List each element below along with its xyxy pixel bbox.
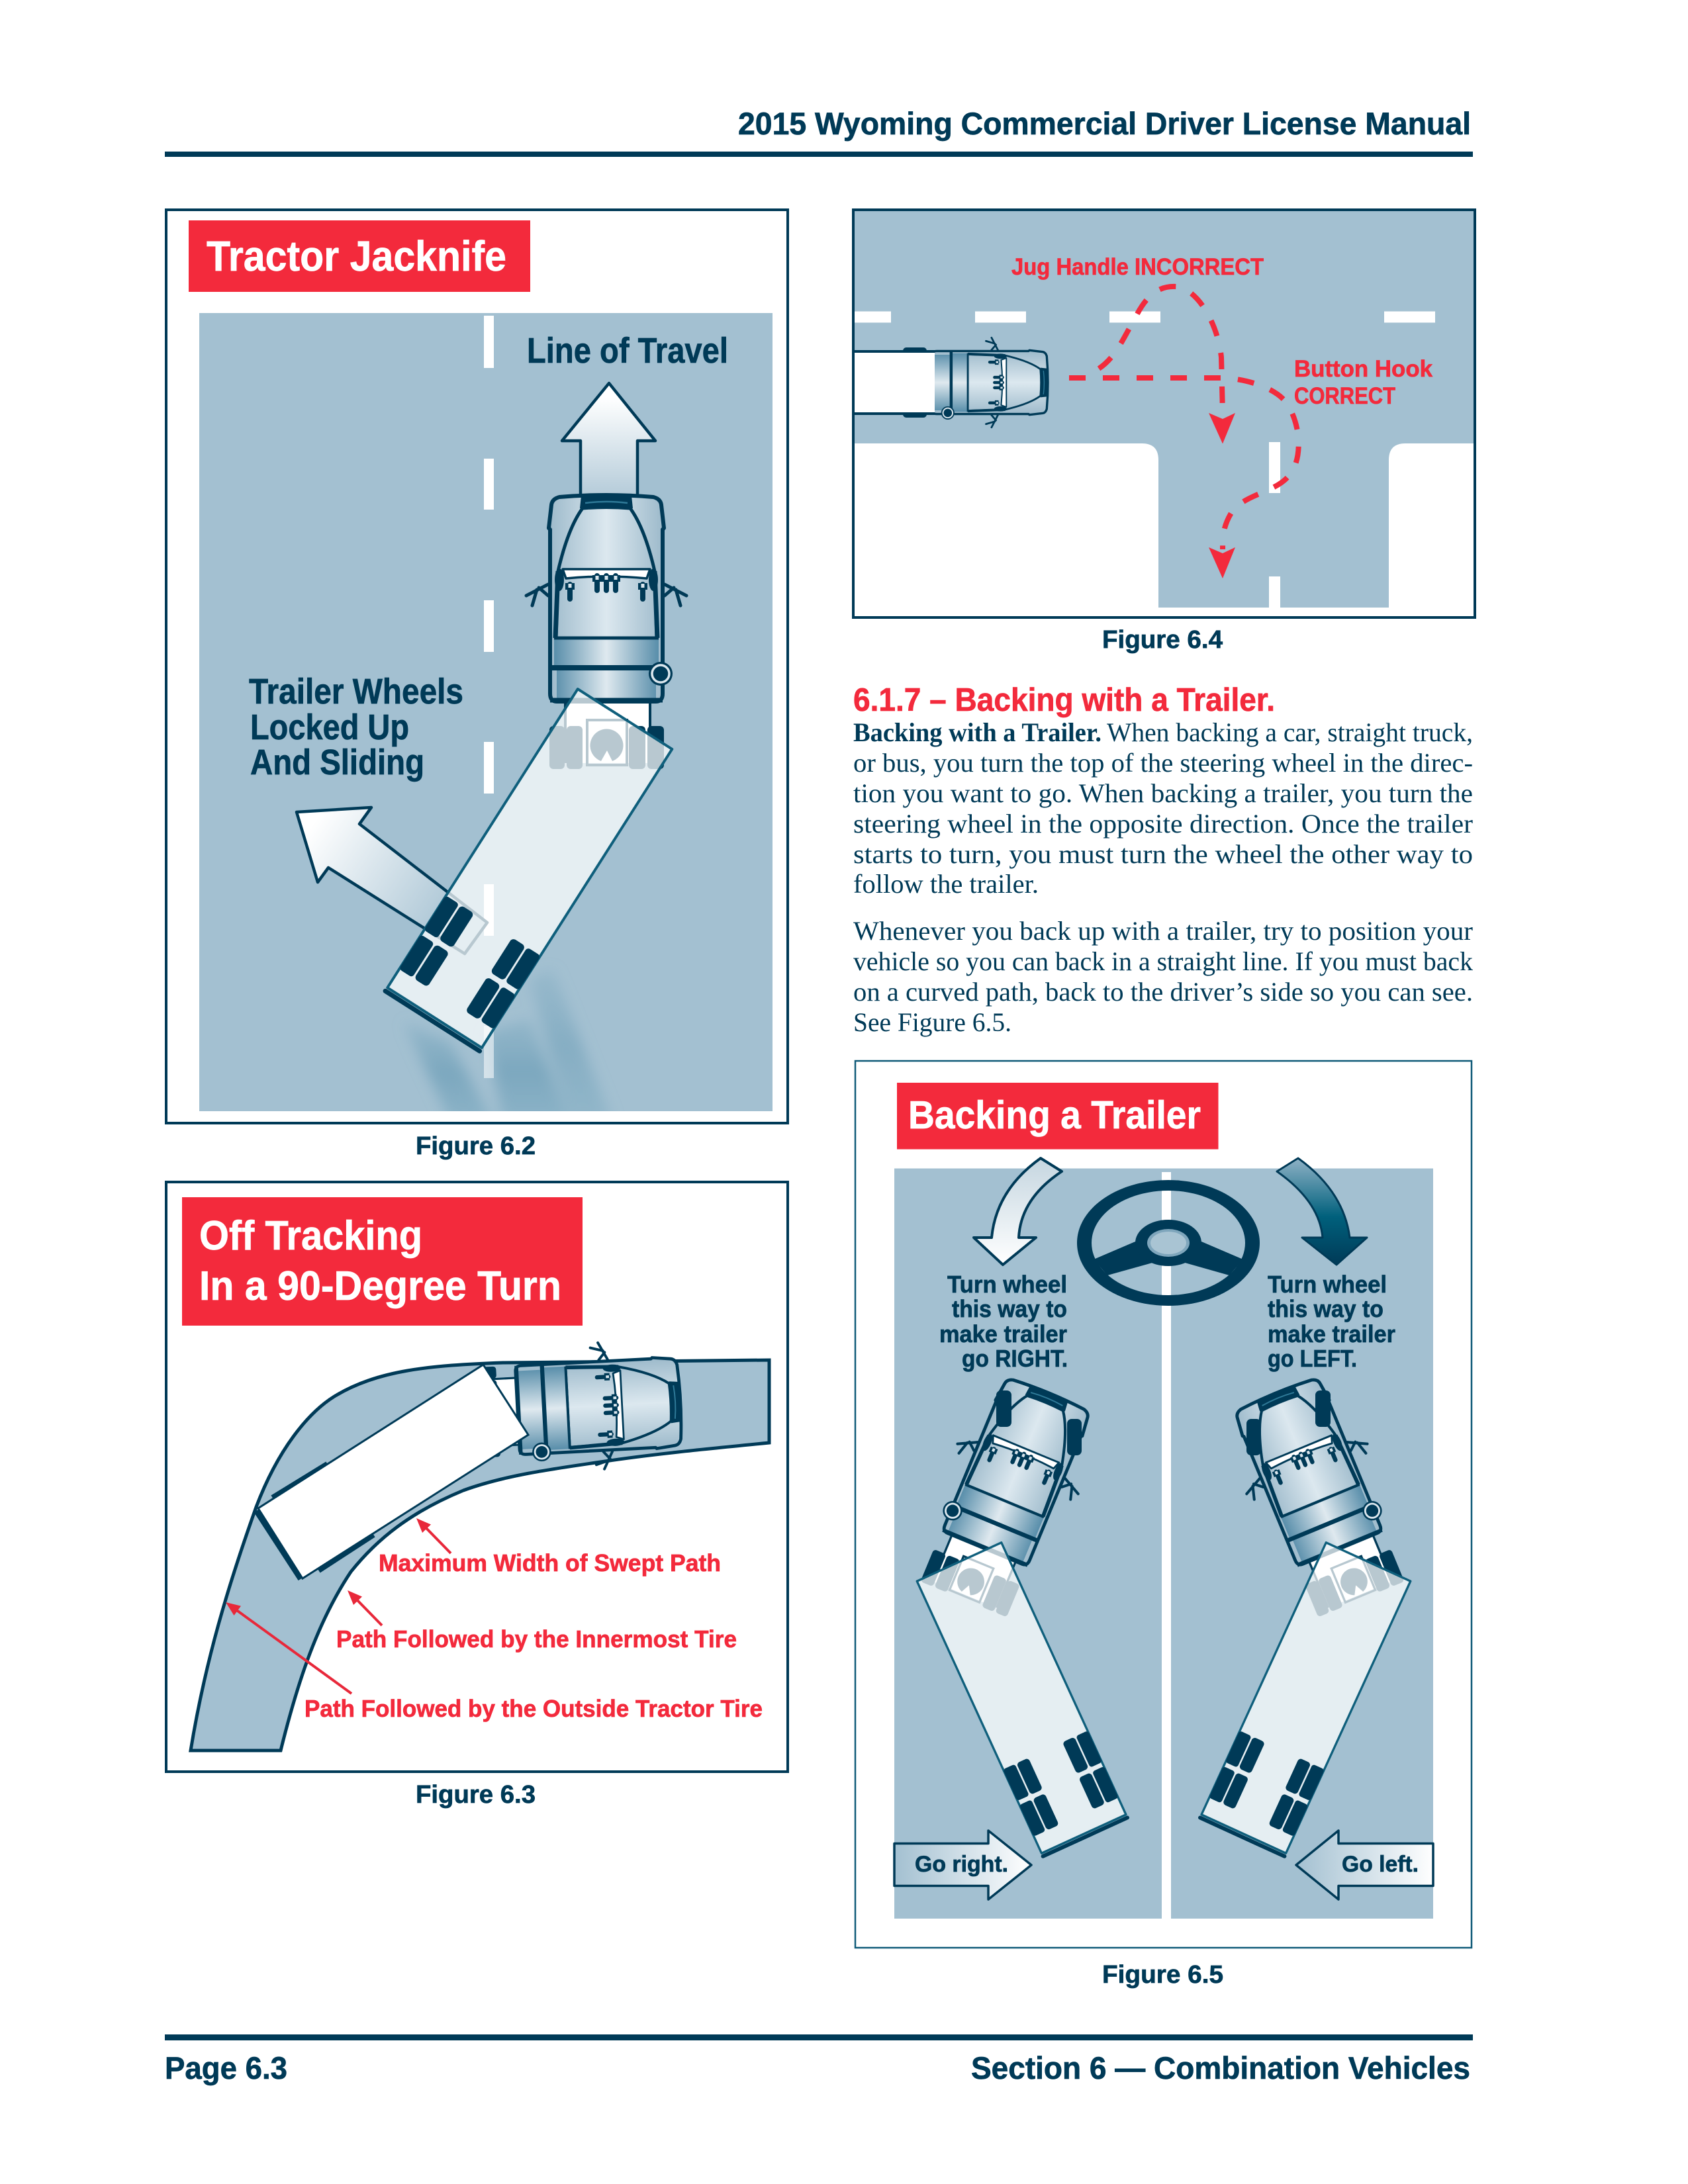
path: jug handle incorrect: [1099, 287, 1235, 443]
label: go left instruction: Turn wheel: [1268, 1271, 1387, 1298]
callout: innermost tire: [336, 1590, 737, 1653]
t-intersection road: [853, 210, 1475, 608]
right trailer: [1200, 1543, 1411, 1856]
label: trailer wheels locked up and sliding: And Sliding: [250, 743, 424, 782]
title banner: off tracking: [182, 1197, 583, 1326]
body paragraph 2: on a curved path, back to the driver’s side so you can see.: [853, 977, 1473, 1007]
arrow: trailer sliding direction: [297, 807, 487, 954]
body paragraph 1: When backing a car, straight truck,: [1107, 717, 1473, 747]
label: go left instruction: [1268, 1271, 1395, 1372]
tractor trailer at turn start: [855, 338, 1048, 428]
page number: Page 6.3: [165, 2050, 287, 2085]
swept path curve: [191, 1360, 769, 1751]
path: button hook correct: [1069, 378, 1299, 578]
callout: innermost tire: Path Followed by the Innermost Tire: [336, 1625, 737, 1653]
caption: figure 6.3: Figure 6.3: [416, 1781, 536, 1809]
road background: [199, 313, 773, 1111]
label: go right instruction: [939, 1271, 1068, 1372]
caption: figure 6.2: Figure 6.2: [416, 1132, 536, 1160]
label: button hook correct: CORRECT: [1294, 383, 1395, 409]
label: trailer wheels locked up and sliding: Trailer Wheels: [249, 672, 463, 711]
header title: 2015 Wyoming Commercial Driver License Manual: [738, 106, 1471, 141]
body paragraph 2: See Figure 6.5.: [853, 1007, 1011, 1037]
arrow: go right: Go right.: [915, 1852, 1008, 1877]
label: jug handle incorrect: Jug Handle INCORRECT: [1011, 254, 1264, 280]
trailer top view: [256, 1365, 528, 1579]
arrow: go right: [894, 1831, 1031, 1899]
panel: figure 6.5 backing a trailer: [855, 1061, 1472, 1948]
arrow: turn wheel left side: [974, 1158, 1062, 1265]
icon: steering wheel: [1077, 1180, 1260, 1306]
body paragraph 1: or bus, you turn the top of the steering wheel in the direc-: [853, 748, 1473, 778]
arrow: go left: Go left.: [1342, 1852, 1419, 1877]
panel: figure 6.2 tractor jacknife: [166, 210, 788, 1123]
body paragraph 2: [853, 916, 1473, 1037]
label: go right instruction: this way to: [952, 1295, 1067, 1322]
label: go left instruction: make trailer: [1268, 1320, 1395, 1347]
body paragraph 1: steering wheel in the opposite direction. Once the trailer: [853, 809, 1473, 839]
callout: maximum width of swept path: [379, 1518, 721, 1576]
arrow: turn wheel right side: [1277, 1158, 1367, 1265]
label: button hook correct: Button Hook: [1294, 356, 1433, 382]
body paragraph 1: [853, 717, 1473, 899]
caption: figure 6.4: Figure 6.4: [1102, 626, 1223, 654]
title banner: backing a trailer: Backing a Trailer: [908, 1093, 1201, 1137]
page header: [165, 106, 1473, 157]
panel: figure 6.3 off tracking: [166, 1182, 788, 1772]
callout: maximum width of swept path: Maximum Width of Swept Path: [379, 1549, 721, 1576]
title banner: tractor jacknife: [189, 220, 530, 292]
callout: outside tractor tire: Path Followed by the Outside Tractor Tire: [305, 1695, 763, 1722]
tractor top view: [526, 495, 686, 769]
label: go right instruction: make trailer: [939, 1320, 1067, 1347]
label: go right instruction: Turn wheel: [947, 1271, 1067, 1298]
title banner: off tracking: Off Tracking: [199, 1213, 422, 1259]
body paragraph 2: vehicle so you can back in a straight line. If you must back: [853, 946, 1473, 976]
right tractor: [1215, 1368, 1421, 1624]
callout: outside tractor tire: [226, 1602, 763, 1722]
body paragraph 1: follow the trailer.: [853, 869, 1039, 899]
section name: Section 6 — Combination Vehicles: [971, 2050, 1470, 2085]
section heading: 6.1.7 – Backing with a Trailer.: [853, 682, 1275, 718]
centre line dashes: [484, 316, 494, 1078]
arrow: go left: [1296, 1831, 1433, 1899]
left trailer: [917, 1543, 1127, 1856]
page footer: [165, 2034, 1473, 2085]
body paragraph 1: tion you want to go. When backing a trailer, you turn the: [853, 778, 1473, 808]
lane dashes: [855, 311, 1435, 608]
label: trailer wheels locked up and sliding: [249, 672, 463, 782]
body paragraph 2: Whenever you back up with a trailer, try to position your: [853, 916, 1473, 946]
label: button hook correct: [1294, 356, 1433, 409]
title banner: off tracking: In a 90-Degree Turn: [199, 1263, 561, 1309]
page canvas: [165, 111, 1476, 2086]
skid marks: [409, 975, 609, 1111]
caption: figure 6.5: Figure 6.5: [1102, 1961, 1223, 1989]
tractor top view: [486, 1341, 683, 1471]
label: go right instruction: go RIGHT.: [962, 1345, 1068, 1372]
label: trailer wheels locked up and sliding: Locked Up: [250, 707, 409, 747]
body paragraph 1: Backing with a Trailer.: [853, 717, 1102, 747]
label: go left instruction: this way to: [1268, 1295, 1383, 1322]
road background with centre stripe: [894, 1169, 1433, 1919]
left tractor: [904, 1368, 1109, 1624]
title banner: backing a trailer: [897, 1083, 1218, 1149]
trailer jackknifed: [385, 689, 673, 1051]
label: go left instruction: go LEFT.: [1268, 1345, 1357, 1372]
label: line of travel: Line of Travel: [527, 331, 728, 371]
title banner: tractor jacknife: Tractor Jacknife: [207, 232, 506, 280]
body paragraph 1: starts to turn, you must turn the wheel the other way to: [853, 839, 1473, 869]
panel: figure 6.4 turning paths: [853, 210, 1475, 617]
arrow: line of travel: [562, 383, 655, 503]
